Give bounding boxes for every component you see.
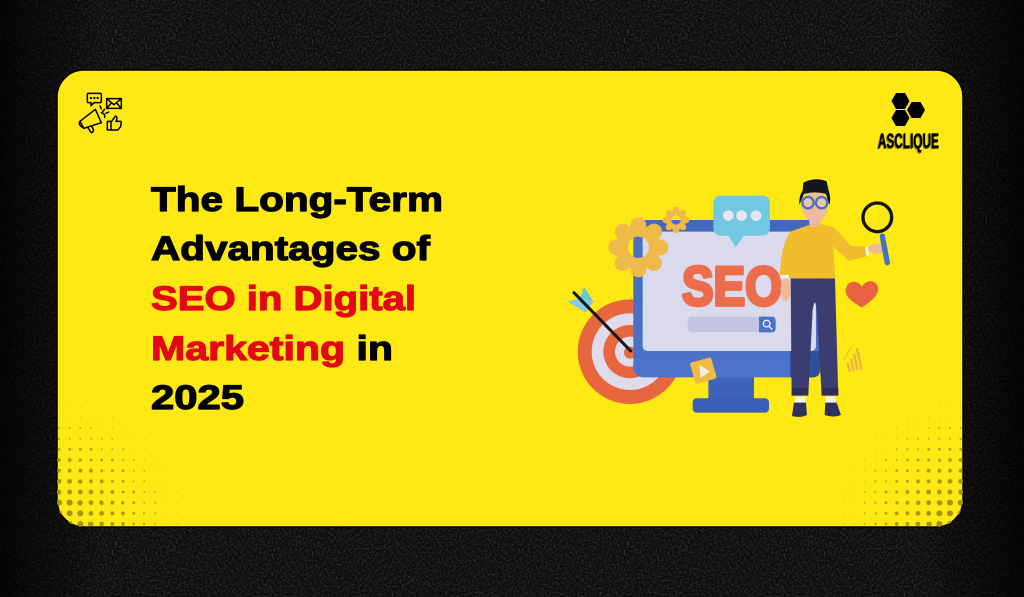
speech bubble — [713, 196, 770, 247]
panel: yellow card — [57, 70, 963, 527]
title — [151, 181, 443, 417]
monitor stand — [693, 375, 769, 413]
shoes — [792, 403, 807, 417]
illustration: SEO monitor with person — [567, 179, 892, 417]
title line 1: The Long-Term — [151, 181, 443, 219]
search bar — [688, 317, 776, 332]
logo wordmark: ASCLIQUE — [878, 130, 939, 153]
right hand — [869, 244, 886, 254]
trousers — [791, 278, 838, 395]
title line 4: Marketing in — [151, 330, 393, 368]
SEO lettering: SEO — [682, 256, 782, 317]
monitor — [633, 220, 820, 377]
heart — [846, 281, 878, 308]
play button — [690, 357, 717, 384]
person — [780, 179, 892, 417]
target with arrow — [567, 287, 682, 404]
logo: ASCLIQUE — [878, 93, 939, 153]
head — [802, 191, 828, 222]
hair — [799, 179, 830, 205]
title line 5: 2025 — [151, 379, 244, 417]
small gear — [663, 207, 689, 233]
neck — [809, 217, 821, 230]
icon: marketing megaphone, chat, mail, thumbs up — [79, 93, 121, 133]
title line 3 highlighted: SEO in Digital — [151, 280, 416, 318]
yellow sweater — [780, 224, 868, 278]
left hand — [781, 277, 791, 301]
title line 2: Advantages of — [151, 230, 431, 268]
icon: three hexagons — [892, 93, 925, 126]
large gear — [608, 217, 668, 277]
glasses — [802, 197, 827, 208]
magnifier — [882, 236, 887, 263]
small bar chart — [841, 345, 863, 373]
